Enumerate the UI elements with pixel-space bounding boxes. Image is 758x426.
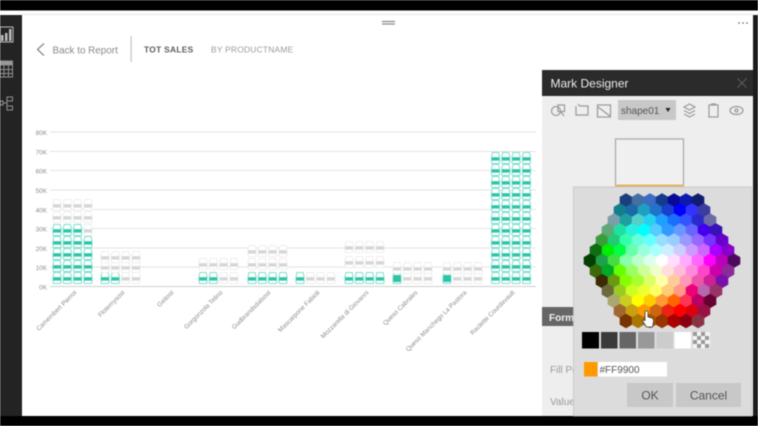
icon: report view: [0, 27, 13, 42]
icon: data view: [0, 61, 12, 77]
marks: Gorgonzola Telino: [199, 258, 238, 284]
y axis labels: 20K: [36, 246, 48, 253]
x axis labels: Camembert Pierrot: [35, 289, 79, 333]
x axis labels: Geitost: [156, 289, 176, 309]
marks: Queso Cabrales: [393, 262, 432, 284]
Cancel button: [676, 383, 741, 407]
x axis labels: Queso Cabrales: [382, 289, 419, 327]
marks: Mozzarella di Giovanni: [345, 242, 384, 284]
back to report link: [38, 44, 118, 56]
y axis labels: 50K: [36, 188, 48, 195]
y axis labels: 80K: [36, 130, 48, 137]
shape selector: [618, 100, 676, 120]
selected colour swatch: [584, 362, 598, 376]
shape orange baseline: [615, 184, 684, 186]
fill percent label: Fill Pe: [550, 365, 578, 376]
focus mode handle: [382, 22, 395, 24]
x axis labels: [35, 289, 517, 353]
x axis labels: Mozzarella di Giovanni: [320, 289, 370, 340]
right edge strip: [753, 15, 758, 416]
x axis labels: Gudbrandsdalsost: [231, 289, 273, 331]
icon: back chevron: [38, 44, 44, 56]
colour hexagon wheel: [584, 193, 740, 328]
x axis labels: Queso Manchego La Pastora: [405, 289, 469, 353]
heading: measure: TOT SALES: [144, 44, 194, 54]
header divider: [130, 36, 132, 62]
OK button: [627, 383, 673, 407]
popup background: [574, 187, 752, 416]
marks: Flotemysost: [101, 252, 140, 284]
y axis gridlines: [50, 132, 536, 286]
icon: relationships view: [0, 97, 12, 110]
shape selector: shape01: [621, 106, 660, 117]
greyscale swatches: [582, 332, 710, 348]
marks: Queso Manchego La Pastora: [443, 262, 482, 284]
format tab: [542, 307, 574, 326]
bottom video bar: [0, 416, 758, 426]
x axis labels: Flotemysost: [97, 289, 127, 319]
x axis labels: Mascarpone Fabioli: [277, 289, 321, 334]
y axis labels: 10K: [36, 265, 48, 272]
x axis labels: Gorgonzola Telino: [183, 289, 225, 331]
chart: tot sales by product: [35, 130, 536, 353]
panel: colour picker popup: [574, 187, 752, 416]
value label: Value: [550, 397, 575, 408]
y axis labels: [36, 130, 48, 292]
y axis labels: 70K: [36, 150, 48, 156]
marks: Raclette Courdavault: [492, 152, 530, 284]
shape canvas: [616, 139, 684, 186]
icon: hand cursor: [642, 311, 654, 327]
ribbon edge: [22, 14, 753, 15]
OK button: OK: [641, 388, 659, 402]
y axis labels: 40K: [36, 208, 48, 214]
marks: Gudbrandsdalsost: [248, 246, 287, 284]
y axis labels: 30K: [36, 226, 48, 234]
y axis labels: 60K: [36, 168, 48, 176]
toolbar icons right: [684, 104, 743, 117]
x axis labels: Raclette Courdavault: [469, 289, 517, 337]
icon: close: [738, 78, 746, 88]
back label: Back to Report: [52, 46, 118, 56]
more options dots: [738, 22, 748, 24]
Cancel button: Cancel: [690, 388, 727, 402]
heading: axis: BY PRODUCTNAME: [211, 44, 294, 54]
top video bar: [0, 0, 758, 10]
panel: mark designer: [542, 70, 753, 416]
hex colour input: [598, 362, 667, 376]
panel header: [542, 70, 753, 96]
marks: Mascarpone Fabioli: [296, 272, 335, 284]
y axis labels: 0K: [39, 284, 48, 292]
panel title: Mark Designer: [550, 76, 629, 90]
marks: Camembert Pierrot: [53, 200, 92, 284]
panel body: [542, 70, 753, 416]
hex colour input: #FF9900: [600, 365, 640, 376]
sidebar: [0, 15, 22, 416]
toolbar icons left: [552, 104, 610, 117]
format tab: Form: [549, 313, 574, 324]
